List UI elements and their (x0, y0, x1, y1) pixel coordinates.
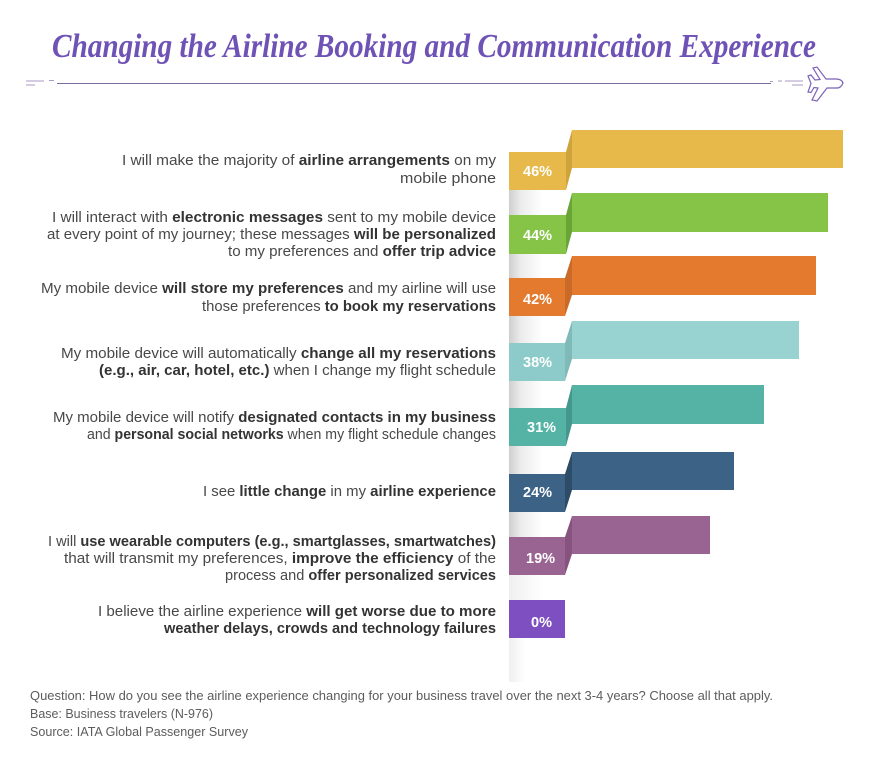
label: 44%: at every point of my journey; these messages will be personalized (47, 226, 496, 243)
label: 31% (53, 409, 496, 443)
label: 46%: mobile phone (400, 170, 496, 187)
label: 19%: I will use wearable computers (e.g., smartglasses, smartwatches) (48, 533, 496, 550)
icon: airplane (808, 67, 843, 101)
label: 31%: and personal social networks when my flight schedule changes (87, 426, 496, 443)
footnote: Base: Business travelers (N-976) (30, 707, 213, 721)
bar: 24%: 24% (523, 485, 552, 501)
label: 42% (41, 280, 496, 315)
bar: 31% (509, 385, 764, 446)
bar: 0% (509, 600, 565, 638)
bar: 19% (509, 516, 710, 575)
label: 31%: My mobile device will notify designated contacts in my business (53, 409, 496, 426)
drop shadows behind chart (509, 190, 543, 682)
bar: 38%: 38% (523, 355, 552, 371)
label: 24%: I see little change in my airline experience (203, 483, 496, 500)
label: 38%: My mobile device will automatically change all my reservations (61, 345, 496, 362)
label: 0%: weather delays, crowds and technology failures (163, 620, 496, 637)
label: 46%: I will make the majority of airline arrangements on my (122, 152, 497, 169)
bar: 0%: 0% (531, 615, 552, 631)
footnote: Question: How do you see the airline experience changing for your business travel over the next 3-4 years? Choose all that apply. (30, 689, 773, 703)
label: 19%: that will transmit my preferences, improve the efficiency of the (64, 550, 496, 567)
bar: 31%: 31% (527, 420, 556, 436)
bar: 42% (509, 256, 816, 316)
label: 44%: I will interact with electronic messages sent to my mobile device (52, 209, 496, 226)
bar: 42%: 42% (523, 292, 552, 308)
bar: 24% (509, 452, 734, 512)
label: 44%: to my preferences and offer trip advice (228, 243, 496, 260)
label: 19% (48, 533, 496, 584)
footnote (30, 689, 773, 739)
label: 0%: I believe the airline experience will get worse due to more (98, 603, 496, 620)
label: 38%: (e.g., air, car, hotel, etc.) when I change my flight schedule (99, 362, 496, 379)
bar: 46%: 46% (523, 164, 552, 180)
bar: 38% (509, 321, 799, 381)
label: 44% (47, 209, 496, 260)
bar: 19%: 19% (526, 551, 555, 567)
label: 19%: process and offer personalized services (225, 567, 496, 584)
label: 38% (61, 345, 496, 379)
label: 46% (122, 152, 497, 187)
bar: 44% (509, 193, 828, 254)
label: 42%: My mobile device will store my preferences and my airline will use (41, 280, 496, 297)
bar: 44%: 44% (523, 228, 552, 244)
label: 0% (98, 603, 496, 637)
bar: 46% (509, 130, 843, 190)
footnote: Source: IATA Global Passenger Survey (30, 725, 249, 739)
title rule with dashes (26, 80, 803, 85)
label: 42%: those preferences to book my reservations (202, 298, 496, 315)
